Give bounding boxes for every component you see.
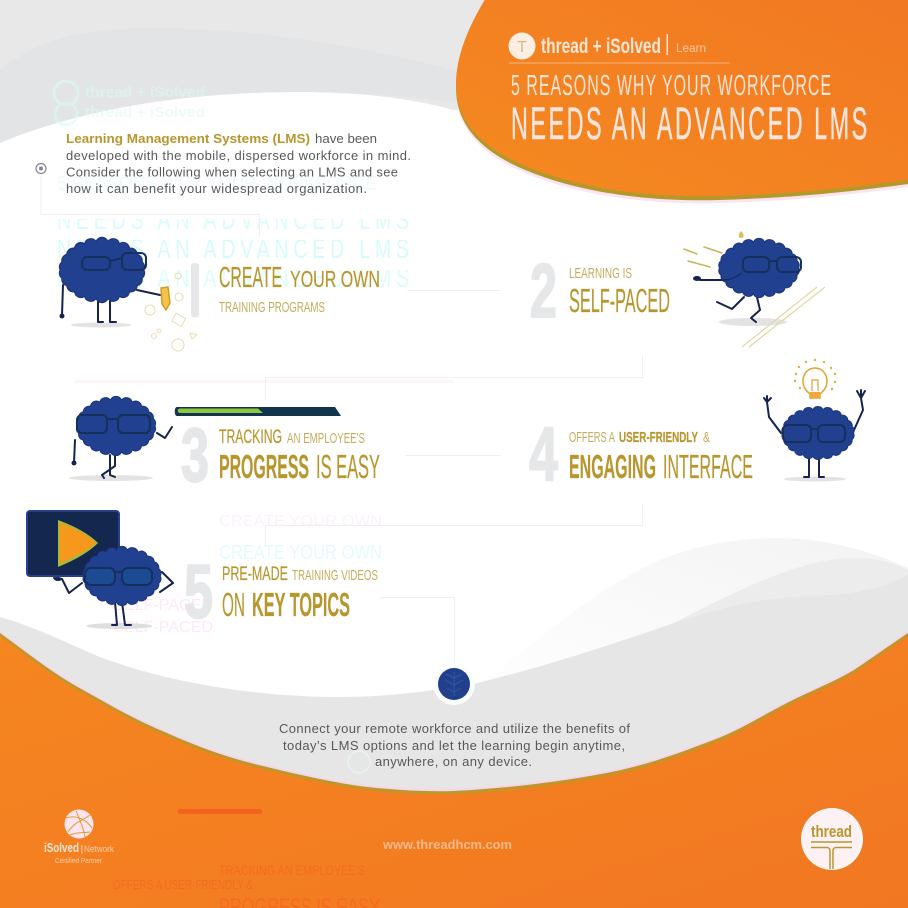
website url: www.threadhcm.com xyxy=(382,837,512,852)
heading 1: TRAINING PROGRAMS xyxy=(219,300,325,316)
icon: target bullet xyxy=(36,164,46,174)
heading 4: ENGAGING xyxy=(569,449,656,486)
brain character 4 xyxy=(764,390,865,482)
panel: reason 2: SELF-PACED xyxy=(569,283,670,320)
header logo xyxy=(508,32,730,64)
heading 2 xyxy=(569,266,670,320)
intro text: Consider the following when selecting an LMS and see xyxy=(66,164,398,180)
brain character 2 xyxy=(684,231,825,347)
number 1 xyxy=(191,249,199,334)
icon: brain node xyxy=(433,663,475,705)
brain character 5 xyxy=(54,546,173,629)
brain character 3 xyxy=(69,396,172,481)
icon: light bulb xyxy=(794,359,836,398)
ghost artifacts on orange xyxy=(113,809,380,908)
connector lines xyxy=(41,176,642,668)
brain character 1 xyxy=(59,237,160,328)
closing text xyxy=(279,721,630,769)
heading 5: ON xyxy=(222,587,245,624)
title xyxy=(511,69,867,149)
faint ghost artifacts upper: SELF-PACED xyxy=(113,619,213,636)
faint ghost artifacts upper xyxy=(54,81,454,636)
heading 3: AN EMPLOYEE'S xyxy=(287,430,365,447)
panel: reason 4: INTERFACE xyxy=(663,449,753,486)
panel: reason 5 xyxy=(27,511,378,635)
panel: reason 4 xyxy=(529,359,865,497)
faint ghost artifacts upper: NEEDS AN ADVANCED LMS xyxy=(57,234,409,265)
header logo: Learn xyxy=(676,41,706,55)
panel: reason 1 xyxy=(59,237,380,351)
intro text: Learning Management Systems (LMS) xyxy=(66,131,310,146)
faint ghost artifacts upper: NEEDS AN ADVANCED LMS xyxy=(57,205,409,236)
heading 5: KEY TOPICS xyxy=(252,587,350,624)
iSolved network logo: Network xyxy=(84,844,114,854)
heading 5: TRAINING VIDEOS xyxy=(292,567,378,584)
panel: reason 2 xyxy=(530,231,825,347)
icon: video screen xyxy=(27,511,119,576)
heading 5 xyxy=(222,564,378,624)
faint ghost artifacts upper: thread + iSolved xyxy=(85,84,205,101)
thread logo xyxy=(800,807,864,871)
intro text: have been xyxy=(315,131,377,146)
iSolved network logo: iSolved xyxy=(44,840,79,855)
heading 2: LEARNING IS xyxy=(569,266,632,282)
text: IS EASY xyxy=(316,449,380,486)
heading 3: TRACKING xyxy=(219,427,282,448)
iSolved network logo: Certified Partner xyxy=(55,858,103,865)
heading 1 xyxy=(219,262,380,316)
closing text: today’s LMS options and let the learning begin anytime, xyxy=(283,738,625,753)
panel: reason 1: 1 xyxy=(191,249,199,334)
heading 4: USER-FRIENDLY xyxy=(619,430,698,446)
closing text: Connect your remote workforce and utilize the benefits of xyxy=(279,721,630,736)
faint ghost artifacts upper: SELF-PACED xyxy=(113,597,213,614)
number 5: 5 xyxy=(184,550,213,635)
heading 1: YOUR OWN xyxy=(290,266,380,292)
bottom orange wave xyxy=(0,631,908,908)
bottom grey waves xyxy=(0,538,908,800)
number 3: 3 xyxy=(181,413,209,498)
ghost artifacts on orange: OFFERS A USER-FRIENDLY & xyxy=(113,877,253,892)
closing text: anywhere, on any device. xyxy=(375,754,532,769)
intro text: developed with the mobile, dispersed workforce in mind. xyxy=(66,148,411,163)
faint ghost artifacts lower: n xyxy=(356,758,362,769)
faint ghost artifacts upper: thread + iSolved xyxy=(85,104,205,121)
heading 4: OFFERS A xyxy=(569,430,615,446)
iSolved network logo xyxy=(44,810,114,865)
faint ghost artifacts upper: CREATE YOUR OWN xyxy=(219,513,382,530)
number 4: 4 xyxy=(529,412,558,497)
number 2: 2 xyxy=(530,249,557,334)
faint ghost artifacts lower xyxy=(348,751,370,773)
heading 5: PRE-MADE xyxy=(222,564,288,585)
thread logo: thread xyxy=(811,822,852,841)
title: NEEDS AN ADVANCED LMS xyxy=(511,99,867,149)
intro text: how it can benefit your widespread organization. xyxy=(66,181,367,196)
heading 4 xyxy=(569,430,753,486)
intro text xyxy=(66,131,411,196)
icon: pencil with ideas xyxy=(145,273,197,351)
title: 5 REASONS WHY YOUR WORKFORCE xyxy=(511,69,831,101)
header logo: T xyxy=(517,39,527,56)
progress bar xyxy=(175,407,341,416)
header logo: thread + iSolved xyxy=(541,35,661,58)
heading 3 xyxy=(219,427,380,486)
heading 3: PROGRESS xyxy=(219,449,309,486)
ghost artifacts on orange: TRACKING AN EMPLOYEE'S xyxy=(219,862,365,878)
heading 4: & xyxy=(703,430,710,446)
faint ghost artifacts upper: NEEDS AN ADVANCED LMS xyxy=(57,263,409,294)
top grey wave xyxy=(0,0,600,143)
faint ghost artifacts upper: 5 REASONS WHY YOUR WORKFORCE xyxy=(57,173,377,195)
heading 1: CREATE xyxy=(219,262,282,294)
header panel: orange blob xyxy=(456,0,908,203)
faint ghost artifacts upper: CREATE YOUR OWN xyxy=(219,542,382,564)
panel: reason 3 xyxy=(69,396,380,498)
